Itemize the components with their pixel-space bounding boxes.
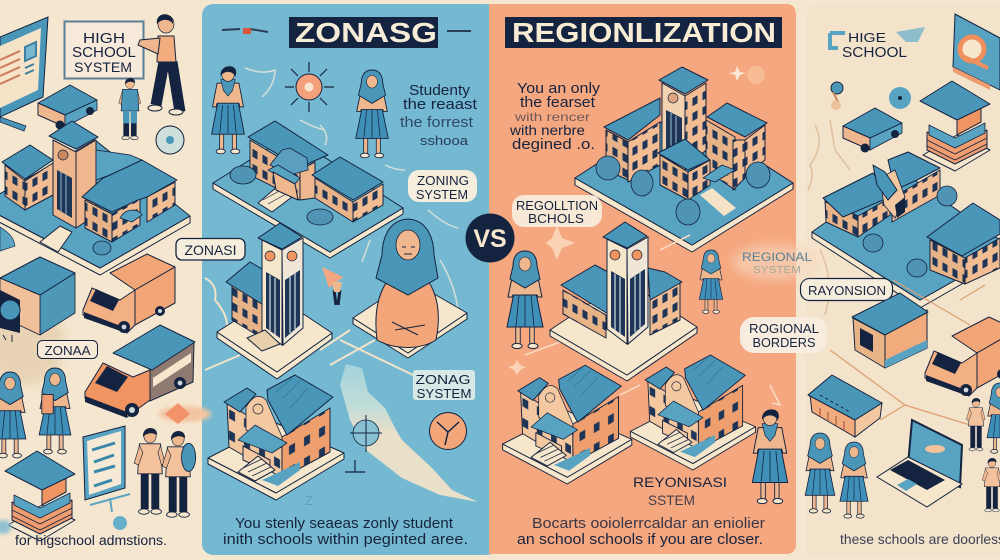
label: reyonisasi system: SSTEM — [648, 493, 695, 508]
icon: orange delivery truck — [83, 254, 175, 333]
label: zoning system: ZONING — [417, 174, 469, 188]
heading: zonasg — [222, 17, 471, 48]
sign: high school system: SCHOOL — [72, 45, 136, 61]
sign: high school system: HIGH — [83, 31, 125, 47]
panel: zonasi — [176, 4, 498, 555]
label: high school — [830, 27, 925, 61]
house school, left — [503, 365, 632, 484]
storage box — [0, 257, 75, 342]
text: student note: the forrest — [400, 114, 474, 131]
icon: crosshair — [350, 415, 382, 452]
house school, right — [630, 355, 755, 470]
sign: high school system — [64, 22, 144, 78]
small tool sketches — [90, 494, 130, 530]
figure: child with backpack — [119, 78, 141, 140]
label: reyonisasi system — [633, 474, 727, 508]
hut — [852, 293, 928, 368]
text: zonasi description — [223, 516, 468, 548]
tower school on platform — [217, 223, 332, 379]
label: rayonsion — [800, 278, 892, 300]
label: rogional borders: ROGIONAL — [749, 321, 819, 336]
label: regional system: SYSTEM — [753, 264, 801, 276]
label: high school: HIGE — [848, 30, 886, 45]
figure: boy talking — [134, 428, 165, 514]
label: regional system: REGIONAL — [742, 252, 813, 264]
faint map lines — [808, 120, 850, 315]
text: regional description — [517, 516, 765, 548]
label: rayonsion: RAYONSION — [808, 283, 886, 298]
label: reyonisasi system: REYONISASI — [633, 474, 727, 490]
text: regional note — [509, 81, 601, 153]
label: regional system — [732, 244, 820, 280]
figure: girl with scarf — [212, 66, 244, 154]
small sparkle badge — [729, 66, 765, 84]
figure: girl in hijab gesturing — [507, 251, 543, 349]
pin marker — [345, 460, 365, 472]
text: regional description: an school schools if you are closer. — [517, 532, 763, 548]
label: zonasi: ZONASI — [184, 242, 236, 258]
faint letter z: Z — [305, 493, 313, 508]
label: regolltion bchols — [512, 195, 602, 227]
icon: book cart — [38, 85, 97, 130]
icon: book stack with cap — [920, 81, 990, 171]
icon: blurred orange arrow crossing into the panel — [159, 403, 211, 424]
text: regional note: You an only — [517, 81, 601, 97]
label: rogional borders — [740, 317, 827, 353]
label: regolltion bchols: BCHOLS — [528, 211, 584, 226]
text: student note: the reaast — [403, 96, 478, 113]
icon: book cart — [843, 108, 902, 152]
label: zoning system — [408, 170, 477, 202]
figure: teacher at the sign — [138, 14, 183, 115]
label: zonag system: ZONAG — [416, 373, 470, 387]
text: regional note: with rencer — [514, 110, 590, 124]
icon: sun — [285, 62, 334, 112]
label: regolltion bchols: REGOLLTION — [516, 198, 598, 213]
badge: vs — [466, 214, 514, 262]
caption: for higschool admstions. — [15, 533, 167, 548]
text: regional note: degined .o. — [512, 137, 595, 153]
panel background — [489, 4, 796, 554]
label: zonaa — [38, 340, 98, 358]
icon: blue disc — [889, 87, 911, 109]
panel: left high school system column — [0, 14, 196, 548]
text: student note: Studenty — [409, 82, 471, 99]
figure: boy with bag — [162, 431, 196, 517]
badge: vs: VS — [473, 225, 507, 253]
soft parchment texture — [0, 305, 65, 385]
pointer and small figure — [322, 267, 343, 305]
figure: girl in hijab — [356, 70, 388, 158]
figure: girl in striped skirt — [752, 409, 788, 504]
icon: blue half shield — [0, 227, 15, 251]
figures: students at right edge — [966, 383, 1000, 512]
icon: blue box truck — [85, 325, 195, 418]
school campus — [812, 152, 1000, 308]
decorative chalk lines — [245, 68, 458, 310]
label: zonaa: ZONAA — [44, 343, 91, 358]
house school on platform — [208, 375, 344, 500]
icon: orange delivery truck — [925, 317, 1000, 396]
panel: regionalization — [489, 4, 796, 554]
figure: small girl in hijab — [699, 250, 723, 313]
text: student note: sshooa — [420, 133, 469, 148]
icon: laptop — [877, 420, 962, 507]
school on platform — [213, 121, 403, 258]
panel background — [202, 4, 498, 555]
school campus with trees — [575, 67, 793, 252]
icon: computer monitor — [0, 17, 48, 131]
school campus — [0, 121, 190, 275]
label: zonag system: SYSTEM — [416, 387, 472, 401]
icon: location pin — [831, 82, 843, 110]
icon: compass badge — [430, 412, 466, 450]
icon: book stack with cap — [5, 451, 75, 541]
label: zonasi — [176, 238, 245, 260]
woman on a platform — [353, 219, 467, 358]
text: zonasi description: inith schools within peginted aree. — [223, 532, 468, 548]
figure: girl with backpack — [39, 368, 71, 454]
notice board — [83, 426, 125, 500]
label: high school: SCHOOL — [842, 44, 907, 61]
icon: book — [953, 14, 1000, 90]
coastline map — [340, 364, 478, 502]
parchment background — [806, 5, 1000, 555]
panel: right high school column — [800, 5, 1000, 555]
faint orange panel streaks — [525, 235, 780, 455]
text: student note — [400, 82, 478, 148]
icon: round badge — [156, 126, 184, 154]
faint region line — [205, 278, 413, 375]
label: zoning system: SYSTEM — [416, 188, 468, 202]
blue smudge — [0, 520, 11, 534]
label: zonag system — [413, 370, 475, 401]
figure: girl in hijab, left — [0, 372, 26, 458]
text: regional note: the fearset — [520, 95, 595, 111]
sparkles — [508, 225, 575, 375]
text: regional note: with nerbre — [509, 122, 585, 138]
heading: zonasg: ZONASG — [295, 17, 437, 48]
text: regional description: Bocarts ooiolerrcaldar an eniolier — [532, 516, 765, 532]
text: zonasi description: You stenly seaeas zonly student — [235, 516, 453, 532]
long market building — [808, 375, 882, 437]
label: rogional borders: BORDERS — [752, 335, 816, 350]
tower school on platform — [550, 222, 697, 381]
road lines — [830, 280, 985, 425]
figures: girls in hijab — [805, 433, 868, 518]
heading: regionlization: REGIONLIZATION — [512, 17, 776, 48]
sign: high school system: SYSTEM — [74, 59, 132, 75]
